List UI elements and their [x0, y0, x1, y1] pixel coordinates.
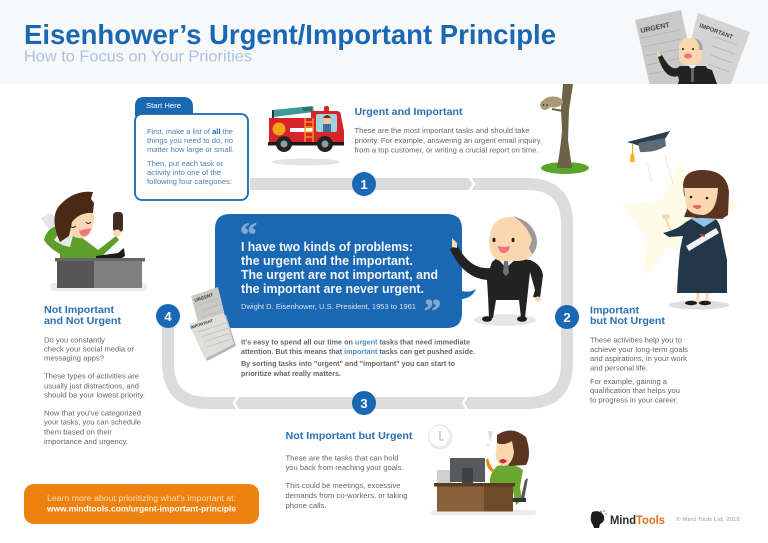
- panel: start here: matter how large or small.: [147, 145, 234, 154]
- text: not important and not urgent: your tasks, you can schedule: [44, 420, 141, 426]
- text: not important but urgent: demands from co-workers, or taking: [286, 493, 408, 500]
- icon: graduate with star: [622, 131, 743, 310]
- subtitle: How to Focus on Your Priorities: [24, 48, 252, 66]
- header band: [0, 0, 768, 84]
- text: not important and not urgent: Do you constantly: [44, 338, 106, 344]
- panel: quote: the important are never urgent.: [241, 281, 424, 296]
- number 2: 2: [563, 310, 571, 325]
- number 2: [555, 305, 579, 329]
- icon: eisenhower character: [450, 216, 543, 326]
- heading: important but not urgent: Important: [590, 304, 640, 316]
- heading: not important but urgent: Not Important but Urgent: [286, 430, 413, 442]
- text: important but not urgent: and personal life.: [590, 366, 648, 372]
- logo: mind tools: [591, 510, 665, 528]
- heading: not important and not urgent: and Not Urgent: [44, 315, 122, 327]
- number 4: 4: [164, 309, 172, 324]
- text: not important and not urgent: Now that you've categorized: [44, 410, 141, 418]
- text: intro body: It's easy to spend all our time on urgent tasks that need immediate: [241, 340, 470, 346]
- panel: start here: following four categories:: [147, 177, 232, 186]
- text: intro body: By sorting tasks into "urgent" and "important" you can start to: [241, 361, 455, 368]
- panel: quote: ”: [424, 293, 441, 330]
- text: not important and not urgent: importance and urgency.: [44, 439, 128, 446]
- text: important but not urgent: to progress in your career.: [590, 398, 678, 404]
- text: urgent and important: [354, 128, 541, 154]
- panel: quote: “: [240, 217, 257, 254]
- text: not important and not urgent: check your social media or: [44, 346, 135, 354]
- panel: start here: activity into one of the: [147, 168, 221, 177]
- panel: quote: The urgent are not important, and: [241, 267, 438, 282]
- text: not important but urgent: you back from reaching your goals.: [286, 465, 404, 472]
- text: intro body: attention. But this means that important tasks can get pushed aside.: [241, 349, 475, 356]
- text: urgent and important: priority. For example, answering an urgent email inquiry: [354, 138, 541, 145]
- icon: stacked papers: URGENT: [194, 292, 214, 303]
- process track: [168, 176, 567, 411]
- icon: header papers and man: URGENT: [640, 22, 671, 35]
- icon: tree and cat: [540, 84, 589, 174]
- copyright: © Mind Tools Ltd, 2018: [676, 516, 740, 523]
- heading: urgent and important: Urgent and Important: [354, 106, 463, 118]
- logo: mind tools: MindTools: [610, 513, 665, 527]
- heading: not important and not urgent: Not Important: [44, 304, 115, 316]
- text: urgent and important: These are the most important tasks and should take: [354, 128, 530, 135]
- callout: learn more: www.mindtools.com/urgent-important-principle: [46, 504, 237, 514]
- text: intro body: prioritize what really matters.: [241, 371, 341, 378]
- text: not important but urgent: phone calls.: [286, 503, 327, 510]
- icon: stacked papers: [189, 287, 236, 361]
- title: Eisenhower’s Urgent/Important Principle: [24, 19, 556, 50]
- number 3: 3: [360, 396, 368, 411]
- text: intro body: [241, 340, 475, 378]
- icon: stacked papers: IMPORTANT: [190, 318, 214, 330]
- number 3: [352, 391, 376, 415]
- number 1: [352, 172, 376, 196]
- text: important but not urgent: qualification that helps you: [590, 388, 680, 395]
- panel: quote: the urgent and the important.: [241, 253, 413, 268]
- icon: relaxing man at desk: [41, 192, 147, 291]
- number 4: [156, 304, 180, 328]
- panel: start here: things you need to do, no: [147, 136, 233, 145]
- callout: learn more: [24, 484, 259, 524]
- panel: quote: I have two kinds of problems:: [241, 239, 413, 254]
- text: not important and not urgent: These types of activities are: [44, 374, 139, 380]
- number 1: 1: [360, 177, 368, 192]
- panel: start here: Start Here: [146, 103, 181, 110]
- text: not important but urgent: This could be meetings, excessive: [286, 483, 401, 490]
- text: not important and not urgent: usually just distractions, and: [44, 384, 139, 390]
- text: important but not urgent: For example, gaining a: [590, 379, 667, 386]
- text: not important and not urgent: them based on their: [44, 430, 113, 436]
- text: important but not urgent: [590, 338, 689, 404]
- heading: important but not urgent: but Not Urgent: [590, 315, 665, 327]
- text: urgent and important: from a top customer, or writing a crucial report on time.: [354, 148, 539, 154]
- icon: stressed woman at desk: [428, 424, 536, 515]
- text: not important and not urgent: [44, 338, 145, 446]
- icon: fire truck: [268, 106, 344, 166]
- text: important but not urgent: These activities help you to: [590, 338, 682, 344]
- panel: start here: First, make a list of all the: [147, 127, 233, 136]
- icon: header papers and man: IMPORTANT: [698, 23, 734, 41]
- heading: not important and not urgent: [44, 304, 122, 327]
- panel: quote: [215, 214, 476, 330]
- icon: header papers and man: [635, 10, 750, 84]
- text: important but not urgent: achieve your long-term goals: [590, 347, 689, 354]
- callout: learn more: Learn more about prioritizing what's important at:: [47, 494, 236, 503]
- panel: start here: [135, 97, 248, 200]
- heading: important but not urgent: [590, 304, 665, 327]
- panel: start here: Then, put each task or: [147, 159, 224, 168]
- text: not important and not urgent: messaging apps?: [44, 356, 104, 362]
- panel: quote: Dwight D. Eisenhower, U.S. President, 1953 to 1961: [241, 302, 416, 311]
- text: not important but urgent: These are the tasks that can hold: [286, 456, 399, 462]
- text: important but not urgent: and aspirations, in your work: [590, 356, 688, 363]
- text: not important but urgent: [286, 456, 408, 510]
- text: not important and not urgent: should be your lowest priority.: [44, 392, 145, 400]
